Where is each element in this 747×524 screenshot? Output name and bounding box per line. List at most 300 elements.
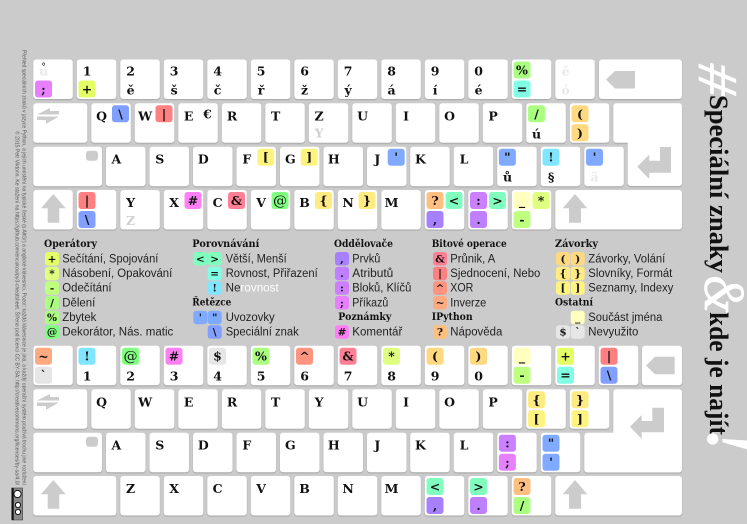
key: _ * -: _ <box>519 193 526 209</box>
key: * 8: * <box>388 349 395 364</box>
key: 6 ž <box>294 60 334 99</box>
legend: Operátory: + <box>48 254 56 266</box>
key: K: K <box>415 438 427 453</box>
legend: Operátory: * <box>49 268 55 280</box>
key: K: K <box>415 152 427 167</box>
legend: Oddělovače: Příkazů <box>352 297 388 309</box>
key: ů ;: ; <box>41 82 46 96</box>
key: ^ 6: ^ <box>299 349 310 364</box>
key: I <box>396 103 435 143</box>
key: N }: } <box>363 193 371 208</box>
key: D: D <box>198 438 209 453</box>
key: ( ): ) <box>577 125 583 140</box>
key: V @: @ <box>273 193 287 209</box>
key: ( ): ( <box>577 106 583 121</box>
key: ~ `: ` <box>40 368 47 383</box>
key: T <box>265 389 305 429</box>
key: F <box>236 433 276 472</box>
key: 4 č: č <box>214 82 222 98</box>
key: / ú: ú <box>532 126 541 141</box>
key: # 3 <box>164 346 203 385</box>
key: H <box>324 147 363 186</box>
key: Y Z: Z <box>126 213 135 228</box>
key: W: W <box>137 394 153 409</box>
key: 3 š: š <box>171 82 178 98</box>
key: 1 +: 1 <box>83 64 91 78</box>
key: _ * -: - <box>519 212 525 227</box>
key: % =: = <box>517 82 527 96</box>
legend: Oddělovače: ; <box>340 297 344 309</box>
legend: Bitové operace: Sjednocení, Nebo <box>450 268 540 280</box>
key: 5 ř: ř <box>258 82 265 98</box>
key: A <box>106 147 146 186</box>
key: { [ <box>526 389 566 429</box>
legend: Porovnávání: = <box>210 268 219 280</box>
key: P <box>483 103 522 143</box>
key: H <box>324 433 363 472</box>
legend: Poznámky: Poznámky <box>338 312 392 323</box>
key: ( ) <box>570 103 609 143</box>
key: } ]: ] <box>577 411 583 426</box>
key: O <box>439 389 479 429</box>
legend: Ostatní: _ <box>575 312 581 325</box>
key: _ -: - <box>519 368 525 383</box>
key: 0 é: 0 <box>474 64 483 78</box>
key: E €: € <box>202 106 212 121</box>
key: % 5 <box>251 346 290 385</box>
key: D <box>193 433 232 472</box>
key: ^ 6 <box>294 346 334 385</box>
key: left shift short <box>33 190 73 230</box>
legend: Operátory: % <box>47 312 57 324</box>
key: V <box>251 476 290 516</box>
key: 6 ž: ž <box>301 82 308 98</box>
key: Q: Q <box>96 394 107 409</box>
key: ( 9: 9 <box>431 369 439 384</box>
key: G ] <box>280 147 320 186</box>
key: ) 0 <box>468 346 508 385</box>
key: T: T <box>271 108 281 123</box>
key: 8 á <box>381 60 421 99</box>
legend: Poznámky: # <box>338 327 347 339</box>
legend: Oddělovače <box>334 239 411 310</box>
key: T: T <box>271 394 281 409</box>
key: I: I <box>403 394 409 409</box>
key: enter <box>613 103 682 186</box>
key: : > . <box>468 190 508 230</box>
legend: IPython: Nápověda <box>450 327 503 339</box>
key: 3 š <box>164 60 203 99</box>
key: 7 ý: 7 <box>344 64 352 78</box>
key: " ů: " <box>504 150 511 165</box>
key: ' ä: ' <box>593 150 596 165</box>
icon: CC BY-SA badge <box>12 488 23 520</box>
key: Y Z <box>120 190 160 230</box>
legend: Porovnávání: < <box>196 254 205 266</box>
key: : ; <box>497 433 537 472</box>
key: 2 ě: ě <box>127 82 135 98</box>
key: " ů: ů <box>503 170 512 185</box>
key: G: G <box>285 438 296 453</box>
key: caps lock <box>33 433 102 472</box>
key: > .: . <box>476 498 481 513</box>
key: S <box>150 433 189 472</box>
key: backspace <box>599 60 682 99</box>
key: D: D <box>198 152 209 167</box>
key: * 8 <box>381 346 421 385</box>
legend: Řetězce: \ <box>213 327 217 339</box>
key: Z <box>120 476 160 516</box>
credits text: Přehled speciálních znaků v jazyce Python, a jejich umístění na typické české (s AltGr) a anglické klávesnici. Pozor: každá klávesnice je jiná, a každý operační systém používá trochu jiné rozložení <box>20 50 28 486</box>
key: X #: X <box>169 195 179 210</box>
key: : > .: > <box>492 193 503 208</box>
key: % = <box>512 60 551 99</box>
key: Q <box>91 389 131 429</box>
key: | \ <box>77 190 116 230</box>
legend: Bitové operace: ~ <box>436 297 444 309</box>
key: T <box>265 103 305 143</box>
key: C & <box>207 190 247 230</box>
key: ' ä <box>584 147 624 186</box>
legend: Bitové operace: Bitové operace <box>432 239 507 250</box>
key: : ;: ; <box>505 455 510 470</box>
key: right shift <box>555 476 682 516</box>
legend <box>44 239 674 339</box>
legend: Oddělovače: Oddělovače <box>334 239 393 250</box>
key: @ 2: @ <box>124 349 138 365</box>
key: : ;: : <box>505 436 510 451</box>
legend: Závorky: Závorky <box>555 239 599 250</box>
key: N }: N <box>342 195 354 210</box>
key: Q \ <box>91 103 131 143</box>
key: R: R <box>227 394 238 409</box>
key: C <box>207 476 247 516</box>
key: ě ó <box>555 60 595 99</box>
key: | \ <box>599 346 638 385</box>
key: | \: \ <box>607 368 612 383</box>
key: Z Y: Y <box>314 126 325 141</box>
key: G ]: G <box>285 152 296 167</box>
key: Z: Z <box>126 481 135 496</box>
key: U: U <box>357 108 368 123</box>
key: : > .: . <box>476 212 481 227</box>
key: 0 é <box>468 60 508 99</box>
key: < ,: , <box>433 498 437 513</box>
key: & 7 <box>338 346 377 385</box>
key: * 8: 8 <box>387 369 396 384</box>
key: F: F <box>242 438 251 453</box>
key: N } <box>338 190 377 230</box>
key: E € <box>178 103 218 143</box>
legend: Bitové operace <box>432 239 540 310</box>
legend: Bitové operace: ^ <box>436 283 444 295</box>
legend: IPython <box>432 312 503 339</box>
key: backspace <box>642 346 682 385</box>
key: X: X <box>169 481 179 496</box>
key: N: N <box>342 481 354 496</box>
legend: Ostatní: Nevyužito <box>588 327 638 339</box>
key: } ] <box>570 389 609 429</box>
legend: Oddělovače: Atributů <box>352 268 393 280</box>
legend: Bitové operace: | <box>438 268 442 280</box>
legend: Závorky: Závorky, Volání <box>588 254 666 266</box>
key: H: H <box>328 438 340 453</box>
key: | \: | <box>607 349 611 364</box>
key: C: C <box>213 481 223 496</box>
key: $ 4: 4 <box>213 369 222 384</box>
key: { [: [ <box>534 411 540 426</box>
key: 9 í: í <box>433 82 438 98</box>
key: " ': " <box>548 436 554 451</box>
key: L <box>454 147 493 186</box>
legend: Ostatní: $ <box>559 327 567 339</box>
legend: Operátory: Násobení, Opakování <box>62 268 173 280</box>
legend: Operátory: Sečítání, Spojování <box>62 254 159 266</box>
key: 7 ý: ý <box>343 82 352 98</box>
key: F [: F <box>242 152 251 167</box>
key: J: J <box>373 438 380 453</box>
key: ) 0: 0 <box>474 369 483 384</box>
key: V @ <box>251 190 290 230</box>
key: B {: { <box>319 193 328 208</box>
key: W |: W <box>137 108 153 123</box>
key: / ú: / <box>534 106 539 121</box>
key: E <box>178 389 218 429</box>
key: Y Z: Y <box>125 195 136 210</box>
legend: Ostatní <box>555 297 663 339</box>
key: 4 č <box>207 60 247 99</box>
legend: Porovnávání <box>192 239 318 295</box>
key: : > .: : <box>476 193 481 208</box>
key: J <box>367 433 406 472</box>
key: > . <box>468 476 508 516</box>
key: R <box>222 103 261 143</box>
key: Y <box>309 389 348 429</box>
key: C &: C <box>213 195 223 210</box>
legend: Závorky: } <box>574 268 581 280</box>
key: 0 é: é <box>475 82 483 98</box>
key: " ': ' <box>549 455 553 470</box>
key: $ 4: $ <box>213 349 222 364</box>
key: > .: > <box>473 479 484 494</box>
key: G <box>280 433 320 472</box>
key: caps lock <box>33 147 102 186</box>
key: B { <box>294 190 334 230</box>
legend: Bitové operace: Průnik, A <box>450 254 496 266</box>
key: % =: % <box>516 62 528 78</box>
key: ů ;: ° <box>41 62 46 72</box>
key: 1 + <box>77 60 116 99</box>
key: R <box>222 389 261 429</box>
legend: Operátory: Operátory <box>44 239 98 250</box>
key: ! 1: ! <box>84 349 90 364</box>
key: D <box>193 147 232 186</box>
legend: IPython: IPython <box>432 312 473 323</box>
key: B {: B <box>299 195 310 210</box>
key: W <box>135 389 174 429</box>
key: ( 9 <box>425 346 464 385</box>
key: 4 č: 4 <box>213 64 222 78</box>
key: 5 ř <box>251 60 290 99</box>
legend: Závorky: [ <box>561 283 566 295</box>
key: # 3: 3 <box>170 369 178 384</box>
title <box>686 63 747 455</box>
legend: Porovnávání: Nerovnost <box>226 283 280 295</box>
key: V @: V <box>255 195 266 210</box>
key: K <box>410 147 450 186</box>
key: ' ä: ä <box>591 170 599 185</box>
legend: Ostatní: ` <box>575 327 580 339</box>
legend: Porovnávání: Rovnost, Přiřazení <box>226 268 318 280</box>
key: A <box>106 433 146 472</box>
key: @ 2 <box>120 346 160 385</box>
key: C &: & <box>231 193 243 208</box>
legend: Řetězce: " <box>212 312 217 324</box>
key: M: M <box>385 195 399 210</box>
key: W | <box>135 103 174 143</box>
key: ů ; <box>33 60 73 99</box>
key: I <box>396 389 435 429</box>
key: F [ <box>236 147 276 186</box>
legend: Oddělovače: : <box>340 283 344 295</box>
legend: Bitové operace: & <box>435 254 445 266</box>
legend: Závorky: Slovníky, Formát <box>588 268 673 280</box>
legend: Operátory: Zbytek <box>62 312 97 324</box>
key: Q \: \ <box>118 106 123 121</box>
key: ^ 6: 6 <box>300 369 309 384</box>
key: + =: = <box>560 368 571 383</box>
key: E: E <box>184 394 193 409</box>
key: Q \: Q <box>96 108 107 123</box>
legend: Ostatní: Součást jména <box>588 312 663 324</box>
key: P: P <box>488 394 498 409</box>
key: $ 4 <box>207 346 247 385</box>
key: O: O <box>444 108 455 123</box>
key: P <box>483 389 522 429</box>
key: 8 á: á <box>388 82 396 98</box>
key: I: I <box>403 108 409 123</box>
key: right shift <box>555 190 682 230</box>
key: B <box>294 476 334 516</box>
key: Z Y <box>309 103 348 143</box>
key: % 5: % <box>255 349 267 364</box>
key: ! § <box>541 147 580 186</box>
key: " ů <box>497 147 537 186</box>
key: ! 1 <box>77 346 116 385</box>
key: M <box>381 476 421 516</box>
key: / ú <box>526 103 566 143</box>
key: U: U <box>357 394 368 409</box>
key: L: L <box>460 438 469 453</box>
legend: Závorky: { <box>560 268 566 280</box>
key: A: A <box>110 438 121 453</box>
key: { [: { <box>532 392 541 407</box>
key: M: M <box>385 481 399 496</box>
key: ! 1: 1 <box>83 369 91 384</box>
key: L <box>454 433 493 472</box>
key: F [: [ <box>263 150 269 165</box>
key: ě ó: ó <box>561 82 570 98</box>
key: R: R <box>227 108 238 123</box>
key: # 3: # <box>169 349 179 364</box>
key: N <box>338 476 377 516</box>
key: _ * - <box>512 190 551 230</box>
key: < , <box>425 476 464 516</box>
key: ? /: ? <box>518 479 526 494</box>
key: ~ `: ~ <box>38 349 49 364</box>
key: G ]: ] <box>306 150 312 165</box>
keyboard: Czech layout <box>33 60 682 230</box>
key: & 7: & <box>342 349 354 364</box>
legend: Operátory: @ <box>47 327 57 339</box>
legend: Řetězce: Řetězce <box>192 296 231 308</box>
key: K <box>410 433 450 472</box>
key: A: A <box>110 152 121 167</box>
key: 9 í <box>425 60 464 99</box>
key: X #: # <box>188 193 198 208</box>
legend: Řetězce <box>192 296 299 339</box>
key: S: S <box>155 438 164 453</box>
key: 2 ě: 2 <box>126 64 135 78</box>
key: ! §: § <box>548 170 555 185</box>
key: + = <box>555 346 595 385</box>
key: ů ;: u <box>39 64 48 78</box>
key: + =: + <box>560 349 571 364</box>
key: ? < ,: , <box>433 212 437 227</box>
key: Y: Y <box>314 394 325 409</box>
key: S <box>150 147 189 186</box>
key: tab <box>33 389 87 429</box>
key: ? < , <box>425 190 464 230</box>
key: & 7: 7 <box>344 369 352 384</box>
legend: Řetězce: Uvozovky <box>226 312 275 324</box>
legend: Bitové operace: XOR <box>450 283 473 295</box>
legend: Porovnávání: Větší, Menší <box>226 254 287 266</box>
legend: Operátory: Dekorátor, Nás. matic <box>62 327 174 339</box>
key: ? < ,: < <box>449 193 459 208</box>
legend: Oddělovače: , <box>340 254 344 266</box>
key: H: H <box>328 152 340 167</box>
title: kde je najít <box>704 312 733 435</box>
key: ? / <box>512 476 551 516</box>
key: M <box>381 190 421 230</box>
legend: Řetězce: Speciální znak <box>226 327 299 339</box>
legend: Bitové operace: Inverze <box>450 297 486 309</box>
legend: Oddělovače: Prvků <box>352 254 380 266</box>
key: O: O <box>444 394 455 409</box>
key: X <box>164 476 203 516</box>
key: ) 0: ) <box>476 349 481 364</box>
key: E €: E <box>184 108 193 123</box>
key: _ - <box>512 346 551 385</box>
legend: Závorky: ) <box>575 254 580 266</box>
title: Speciální znaky <box>704 95 733 273</box>
key: } ]: } <box>576 392 584 407</box>
legend: Poznámky <box>335 312 403 339</box>
key: V: V <box>255 481 266 496</box>
legend: Oddělovače: Bloků, Klíčů <box>352 283 411 295</box>
key: U <box>352 389 392 429</box>
key: | \: | <box>85 193 89 208</box>
credits text <box>14 50 28 486</box>
key: W |: | <box>162 106 166 121</box>
legend: Závorky: Seznamy, Indexy <box>588 283 674 295</box>
key: J ': ' <box>394 150 398 165</box>
legend: Operátory: Odečítání <box>62 283 112 295</box>
key: X # <box>164 190 203 230</box>
legend: Ostatní: Ostatní <box>555 297 593 308</box>
key: < ,: < <box>430 479 440 494</box>
